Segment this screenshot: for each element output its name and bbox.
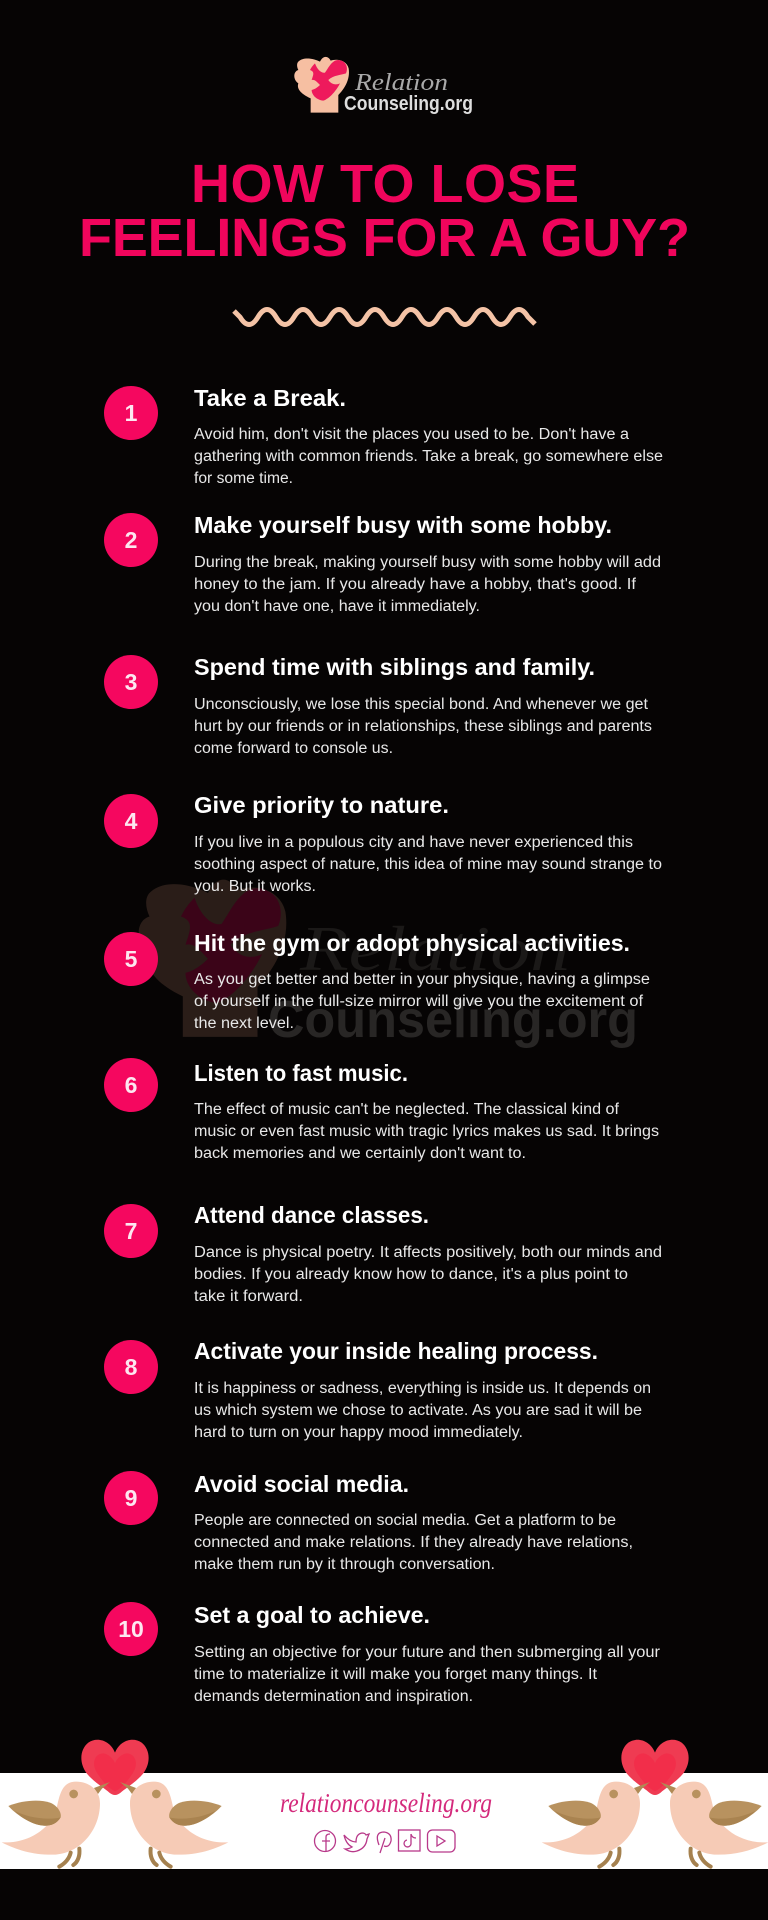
item 5	[104, 930, 650, 1032]
number badge 5	[104, 932, 158, 986]
body 7: Dance is physical poetry. It affects positively, both our minds and	[194, 1244, 662, 1261]
body 5	[194, 971, 650, 1032]
heading 8: Activate your inside healing process.	[194, 1338, 598, 1364]
icon: facebook	[314, 1830, 336, 1852]
item 10	[104, 1602, 660, 1705]
body 3: hurt by our friends or in relationships, these siblings and parents	[194, 718, 652, 735]
item 8	[104, 1338, 651, 1441]
number badge 2: 2	[125, 527, 137, 553]
heading 7: Attend dance classes.	[194, 1202, 429, 1228]
icon: twitter	[344, 1833, 369, 1852]
heading 10: Set a goal to achieve.	[194, 1602, 430, 1628]
body 4	[194, 834, 662, 895]
watermark: Counseling.org: Counseling.org	[268, 991, 638, 1049]
number badge 8	[104, 1340, 158, 1394]
title	[79, 154, 690, 268]
icon: pinterest	[377, 1832, 391, 1853]
heading 9: Avoid social media.	[194, 1471, 409, 1497]
number badge 7: 7	[125, 1218, 137, 1244]
body 6	[194, 1101, 659, 1162]
number badge 2	[104, 513, 158, 567]
body 8	[194, 1380, 651, 1441]
body 7	[194, 1244, 662, 1305]
body 6: The effect of music can't be neglected. The classical kind of	[194, 1101, 620, 1118]
number badge 10: 10	[118, 1616, 144, 1642]
body 3: Unconsciously, we lose this special bond. And whenever we get	[194, 696, 649, 713]
footer band	[0, 1773, 768, 1869]
number badge 6	[104, 1058, 158, 1112]
illustration: left love birds	[2, 1740, 228, 1867]
body 8: us which system we chose to activate. As you are sad it will be	[194, 1402, 642, 1419]
icon: fist with heart	[294, 57, 349, 113]
illustration: right love birds	[542, 1740, 768, 1867]
body 2: you don't have one, have it immediately.	[194, 598, 480, 615]
body 10	[194, 1644, 660, 1705]
body 10: Setting an objective for your future and then submerging all your	[194, 1644, 660, 1661]
body 3	[194, 696, 652, 757]
body 9: make them run by it through conversation.	[194, 1556, 495, 1573]
icon: youtube	[428, 1830, 455, 1852]
heading 4: Give priority to nature.	[194, 792, 449, 818]
number badge 6: 6	[125, 1072, 137, 1098]
body 1: for some time.	[194, 470, 293, 487]
body 6: back memories and we certainly don't want to.	[194, 1145, 526, 1162]
watermark	[139, 880, 638, 1049]
logo	[294, 57, 473, 115]
body 5: As you get better and better in your physique, having a glimpse	[194, 971, 650, 988]
body 2: honey to the jam. If you already have a hobby, that's good. If	[194, 576, 637, 593]
body 9: connected and make relations. If they already have relations,	[194, 1534, 633, 1551]
watermark: Relation: Relation	[299, 913, 570, 984]
item 4	[104, 792, 662, 895]
number badge 9: 9	[125, 1485, 137, 1511]
item 1	[104, 385, 663, 487]
item 6	[104, 1058, 659, 1162]
icon: tiktok	[398, 1830, 420, 1851]
heading 6: Listen to fast music.	[194, 1060, 408, 1086]
body 4: soothing aspect of nature, this idea of mine may sound strange to	[194, 856, 662, 873]
heading 1: Take a Break.	[194, 385, 346, 411]
item 7	[104, 1202, 662, 1305]
title: HOW TO LOSE	[191, 154, 579, 214]
body 7: take it forward.	[194, 1288, 303, 1305]
body 2	[194, 554, 661, 615]
item 3	[104, 654, 652, 757]
heading 3: Spend time with siblings and family.	[194, 654, 595, 680]
body 10: demands determination and inspiration.	[194, 1688, 473, 1705]
body 9: People are connected on social media. Get a platform to be	[194, 1512, 616, 1529]
number badge 1	[104, 386, 158, 440]
number badge 4	[104, 794, 158, 848]
number badge 5: 5	[125, 946, 138, 972]
watermark: fist icon	[139, 880, 286, 1037]
title: FEELINGS FOR A GUY?	[79, 208, 690, 268]
body 10: time to materialize it will make you forget many things. It	[194, 1666, 598, 1683]
number badge 8: 8	[125, 1354, 138, 1380]
number badge 1: 1	[125, 400, 138, 426]
number badge 10	[104, 1602, 158, 1656]
body 1: Avoid him, don't visit the places you used to be. Don't have a	[194, 426, 629, 443]
number badge 3: 3	[125, 669, 137, 695]
body 6: music or even fast music with tragic lyrics makes us sad. It brings	[194, 1123, 659, 1140]
number badge 9	[104, 1471, 158, 1525]
body 4: If you live in a populous city and have never experienced this	[194, 834, 633, 851]
logo: Relation: Relation	[354, 70, 448, 96]
body 8: hard to turn on your happy mood immediately.	[194, 1424, 523, 1441]
item 9	[104, 1471, 633, 1573]
number badge 4: 4	[125, 808, 138, 834]
item 2	[104, 512, 661, 615]
number badge 3	[104, 655, 158, 709]
body 7: bodies. If you already know how to dance, it's a plus point to	[194, 1266, 628, 1283]
divider: wavy line	[234, 310, 535, 324]
logo: Counseling.org: Counseling.org	[344, 93, 473, 115]
social icons	[314, 1830, 455, 1853]
body 1: gathering with common friends. Take a break, go somewhere else	[194, 448, 663, 465]
body 3: come forward to console us.	[194, 740, 393, 757]
heading 2: Make yourself busy with some hobby.	[194, 512, 612, 538]
body 4: you. But it works.	[194, 878, 316, 895]
body 9	[194, 1512, 633, 1573]
number badge 7	[104, 1204, 158, 1258]
body 5: the next level.	[194, 1015, 294, 1032]
heading 5: Hit the gym or adopt physical activities.	[194, 930, 630, 956]
body 1	[194, 426, 663, 487]
body 2: During the break, making yourself busy with some hobby will add	[194, 554, 661, 571]
footer website url: relationcounseling.org	[280, 1788, 492, 1818]
body 5: of yourself in the full-size mirror will give you the excitement of	[194, 993, 644, 1010]
body 8: It is happiness or sadness, everything is inside us. It depends on	[194, 1380, 651, 1397]
